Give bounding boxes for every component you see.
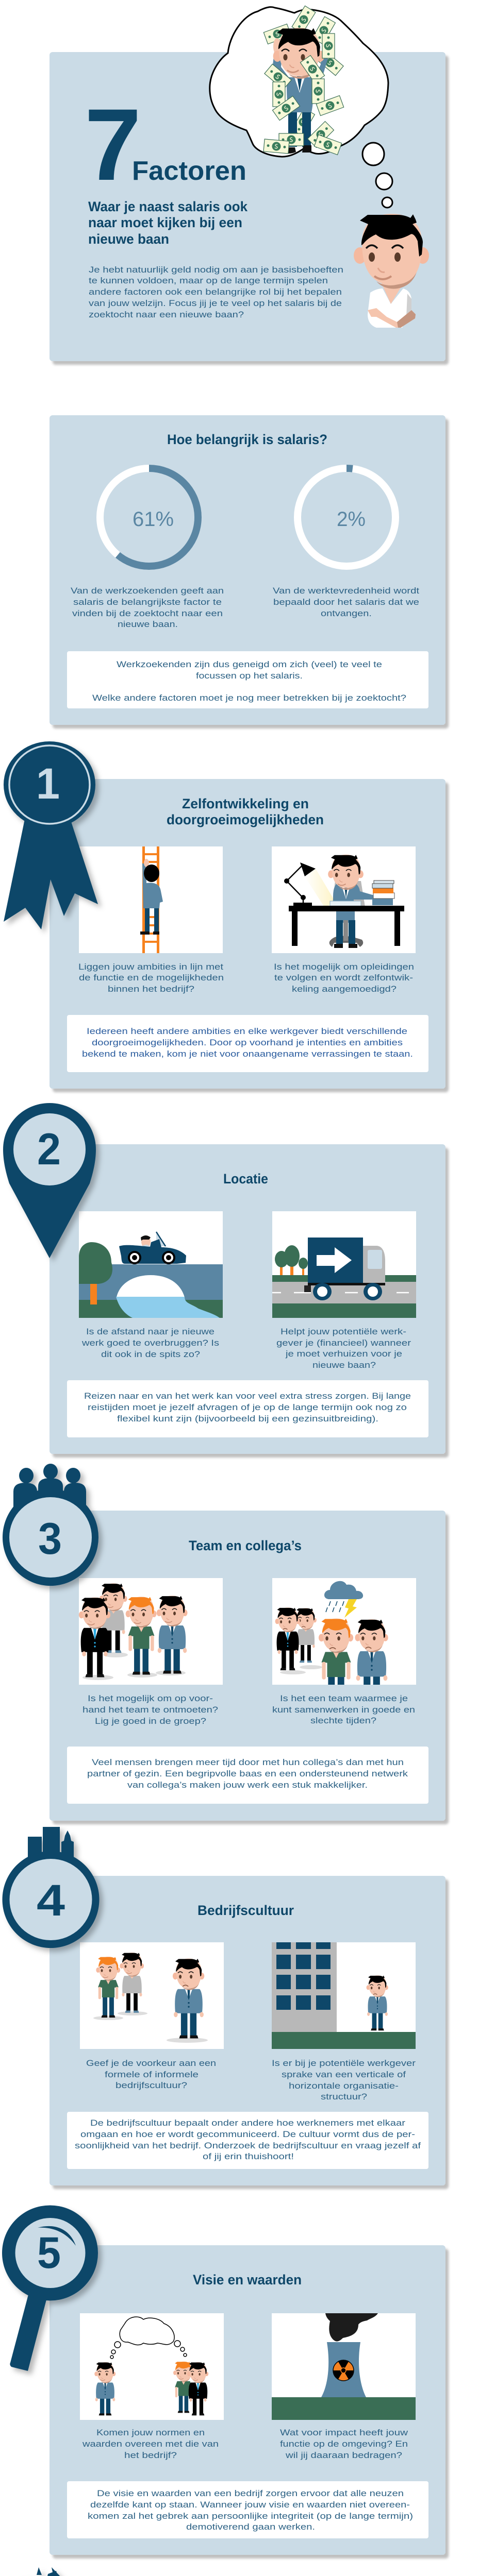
caption right: structuur? bbox=[321, 2092, 367, 2102]
intro text: andere factoren ook een belangrijke rol bij het bepalen bbox=[89, 287, 342, 297]
callout: Werkzoekenden zijn dus geneigd om zich (veel) te veel te bbox=[117, 659, 382, 669]
callout: Reizen naar en van het werk kan voor veel extra stress zorgen. Bij lange bbox=[84, 1391, 411, 1401]
caption left bbox=[81, 1327, 219, 1359]
illustration: informal colleagues and formal man bbox=[80, 1942, 224, 2049]
panel: factor 4 bbox=[2, 1827, 446, 2185]
intro text: Je hebt natuurlijk geld nodig om aan je basisbehoeften bbox=[89, 265, 343, 275]
callout: flexibel kunt zijn (bijvoorbeeld bij een gezinsuitbreiding). bbox=[117, 1414, 378, 1423]
illustration: shared thought bbox=[80, 2313, 224, 2420]
icon: magnifier with 5: 5 bbox=[37, 2228, 61, 2278]
illustration: studying man at desk bbox=[272, 846, 416, 953]
icon: car with 6 bbox=[1, 2567, 96, 2576]
icon: ribbon with 1 bbox=[4, 741, 98, 929]
donut chart: 2%: 2% bbox=[337, 508, 366, 531]
caption left: Is de afstand naar je nieuwe bbox=[86, 1327, 214, 1336]
factor 5 heading: Visie en waarden bbox=[193, 2272, 302, 2287]
factor 4 background bbox=[50, 1876, 446, 2185]
caption left: dit ook in de spits zo? bbox=[101, 1349, 200, 1359]
callout: dezelfde kant op staan. Wanneer jouw visie en waarden niet overeen- bbox=[90, 2500, 410, 2510]
caption right bbox=[274, 962, 414, 994]
caption right: horizontale organisatie- bbox=[289, 2081, 399, 2091]
caption left bbox=[78, 962, 224, 994]
caption left bbox=[82, 2428, 219, 2460]
caption left: vinden bij de zoektocht naar een bbox=[72, 608, 223, 618]
caption left bbox=[71, 586, 224, 629]
caption right: gever je (financieel) wanneer bbox=[276, 1338, 411, 1348]
caption right: Is het mogelijk om opleidingen bbox=[274, 962, 414, 972]
bills behind bbox=[263, 6, 343, 136]
factor 4 heading: Bedrijfscultuur bbox=[197, 1903, 294, 1918]
caption left: formele of informele bbox=[105, 2070, 199, 2079]
intro text: zoektocht naar een nieuwe baan? bbox=[89, 310, 244, 319]
factor 5 background bbox=[50, 2245, 446, 2555]
caption left bbox=[86, 2058, 216, 2090]
callout: reistijden moet je jezelf afvragen of je op de lange termijn ook nog zo bbox=[88, 1402, 407, 1412]
callout bbox=[67, 2481, 428, 2538]
salary background bbox=[50, 415, 446, 725]
caption left: Lig je goed in de groep? bbox=[95, 1716, 206, 1726]
caption right: wil jij daaraan bedragen? bbox=[285, 2450, 402, 2460]
caption left: de functie en de mogelijkheden bbox=[79, 973, 224, 982]
caption right: kunt samenwerken in goede en bbox=[272, 1705, 415, 1715]
donut chart: 61%: 61% bbox=[133, 508, 174, 531]
bubble dots bbox=[362, 143, 384, 165]
callout: partner of gezin. Een begripvolle baas en een ondersteunend netwerk bbox=[87, 1769, 408, 1778]
factor 2 heading: Locatie bbox=[223, 1171, 268, 1187]
caption right: Is het een team waarmee je bbox=[280, 1693, 408, 1703]
big numeral 7: 7 bbox=[85, 88, 141, 201]
caption right: nieuwe baan? bbox=[312, 1360, 376, 1370]
intro text bbox=[89, 265, 343, 319]
caption right: Van de werktevredenheid wordt bbox=[273, 586, 419, 596]
caption left: Van de werkzoekenden geeft aan bbox=[71, 586, 224, 596]
caption left: het bedrijf? bbox=[124, 2450, 177, 2460]
icon: map pin with 2 bbox=[3, 1103, 96, 1258]
caption left: binnen het bedrijf? bbox=[108, 984, 194, 994]
caption right: slechte tijden? bbox=[310, 1716, 376, 1725]
caption left: bedrijfscultuur? bbox=[116, 2080, 187, 2090]
donut chart: 2% bbox=[298, 468, 395, 566]
icon: people with 3 bbox=[3, 1464, 98, 1586]
illustration: bridge and car bbox=[79, 1211, 223, 1318]
caption right: Wat voor impact heeft jouw bbox=[280, 2428, 408, 2437]
caption right bbox=[276, 1327, 411, 1370]
callout: demotiverend gaan werken. bbox=[186, 2522, 315, 2532]
callout bbox=[67, 1015, 428, 1072]
illustration: office building bbox=[272, 1942, 416, 2049]
thought bubble with rich man bbox=[210, 6, 392, 208]
callout bbox=[67, 1747, 428, 1804]
subtitle bbox=[88, 199, 248, 247]
callout: Welke andere factoren moet je nog meer betrekken bij je zoektocht? bbox=[92, 693, 406, 703]
caption left: werk goed te overbruggen? Is bbox=[81, 1338, 219, 1348]
callout: Veel mensen brengen meer tijd door met hun collega’s dan met hun bbox=[92, 1757, 404, 1767]
intro text: te kunnen voldoen, maar op de lange termijn spelen bbox=[89, 276, 328, 285]
illustration: happy team bbox=[79, 1578, 223, 1685]
callout bbox=[67, 2112, 428, 2169]
title: Factoren: Factoren bbox=[132, 156, 246, 186]
factor 3 heading: Team en collega’s bbox=[189, 1538, 302, 1553]
factor 3 background bbox=[50, 1511, 446, 1821]
callout: komen zal het gebrek aan persoonlijke integriteit (op de lange termijn) bbox=[88, 2511, 413, 2521]
illustration: cooling tower bbox=[272, 2313, 416, 2420]
caption right bbox=[272, 1693, 415, 1725]
callout bbox=[67, 651, 428, 708]
caption right: je moet verhuizen voor je bbox=[285, 1349, 402, 1359]
rich man bbox=[272, 28, 330, 154]
caption right: Is er bij je potentiële werkgever bbox=[272, 2058, 416, 2068]
panel: factor 1 bbox=[4, 741, 446, 1089]
icon: skyline with 4: 4 bbox=[37, 1876, 65, 1925]
caption right: ontvangen. bbox=[321, 608, 372, 618]
callout: Iedereen heeft andere ambities en elke werkgever biedt verschillende bbox=[87, 1026, 407, 1036]
caption left: Geef je de voorkeur aan een bbox=[86, 2058, 216, 2068]
illustration: ladder climber bbox=[79, 846, 223, 953]
callout: De visie en waarden van een bedrijf zorgen ervoor dat alle neuzen bbox=[97, 2488, 404, 2498]
caption right bbox=[273, 586, 419, 618]
caption left: hand het team te ontmoeten? bbox=[82, 1705, 218, 1715]
caption right: bepaald door het salaris dat we bbox=[273, 597, 419, 607]
callout: van collega’s maken jouw werk een stuk makkelijker. bbox=[127, 1780, 368, 1790]
icon: magnifier with 5 bbox=[2, 2205, 98, 2371]
donut chart: 61% bbox=[100, 468, 198, 566]
factor 1 heading bbox=[167, 796, 324, 827]
factor 2 background bbox=[50, 1144, 446, 1454]
callout: of jij erin thuishoort! bbox=[203, 2151, 294, 2161]
caption left: waarden overeen met die van bbox=[82, 2439, 219, 2449]
panel: factor 5 bbox=[2, 2205, 446, 2555]
intro text: van jouw welzijn. Focus jij je te veel op het salaris bij de bbox=[89, 298, 342, 308]
panel: factor 2 bbox=[3, 1103, 446, 1454]
factor 1 heading: Zelfontwikkeling en bbox=[182, 796, 309, 811]
intro background bbox=[50, 52, 446, 361]
caption right: sprake van een verticale of bbox=[282, 2070, 406, 2079]
caption left bbox=[82, 1693, 218, 1726]
callout: soonlijkheid van het bedrijf. Onderzoek de bedrijfscultuur en vraag jezelf af bbox=[75, 2141, 421, 2150]
caption left: Komen jouw normen en bbox=[96, 2428, 205, 2437]
icon: people with 3: 3 bbox=[38, 1514, 62, 1564]
callout: omgaan en hoe er wordt gecommuniceerd. De cultuur vormt dus de per- bbox=[80, 2129, 415, 2139]
panel: intro bbox=[50, 6, 446, 361]
bills in front bbox=[263, 33, 344, 155]
caption left: Is het mogelijk om op voor- bbox=[88, 1693, 213, 1703]
illustration: moving truck bbox=[272, 1211, 416, 1318]
icon: ribbon with 1: 1 bbox=[36, 759, 60, 808]
caption right: keling aangemoedigd? bbox=[292, 984, 397, 994]
salary heading: Hoe belangrijk is salaris? bbox=[167, 432, 327, 447]
factor 1 heading: doorgroeimogelijkheden bbox=[167, 812, 324, 827]
caption right bbox=[272, 2058, 416, 2102]
subtitle: naar moet kijken bij een bbox=[88, 215, 242, 230]
caption right: te volgen en wordt zelfontwik- bbox=[274, 973, 413, 982]
callout: De bedrijfscultuur bepaalt onder andere hoe werknemers met elkaar bbox=[90, 2118, 405, 2128]
caption right bbox=[280, 2428, 408, 2460]
illustration: team in storm bbox=[272, 1578, 416, 1685]
factor 1 background bbox=[50, 779, 446, 1089]
subtitle: Waar je naast salaris ook bbox=[88, 199, 248, 214]
cloud bbox=[210, 7, 388, 157]
caption left: salaris de belangrijkste factor te bbox=[73, 597, 222, 607]
caption left: Liggen jouw ambities in lijn met bbox=[78, 962, 223, 972]
caption left: nieuwe baan. bbox=[118, 619, 178, 629]
panel: salary bbox=[50, 415, 446, 725]
narrator man bbox=[354, 214, 429, 328]
icon: skyline with 4 bbox=[2, 1827, 99, 1948]
panel: factor 6 bbox=[1, 2567, 446, 2576]
callout: focussen op het salaris. bbox=[196, 671, 303, 681]
callout: bekend te maken, kom je niet voor onaangename verrassingen te staan. bbox=[82, 1049, 413, 1059]
panel: factor 3 bbox=[3, 1464, 446, 1821]
caption right: functie op de omgeving? En bbox=[280, 2439, 408, 2449]
caption right: Helpt jouw potentiële werk- bbox=[280, 1327, 406, 1336]
icon: map pin with 2: 2 bbox=[37, 1125, 61, 1174]
subtitle: nieuwe baan bbox=[88, 231, 169, 247]
callout bbox=[67, 1380, 428, 1437]
callout: doorgroeimogelijkheden. Door op voorhand je intenties en ambities bbox=[92, 1038, 403, 1047]
